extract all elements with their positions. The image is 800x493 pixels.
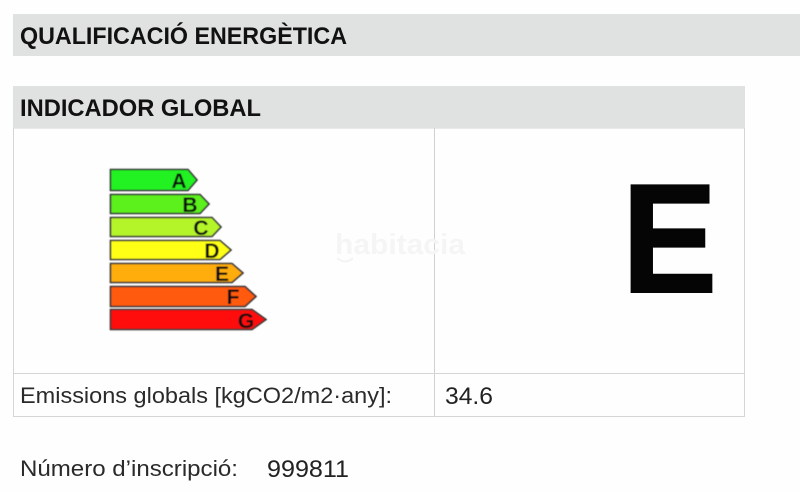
heading: Indicador global: INDICADOR GLOBAL [20,95,261,122]
chart: energy rating arrows A to G: B [182,194,198,217]
chart: energy rating arrows A to G: F [227,286,240,309]
panel: indicador global table [13,86,745,416]
watermark: habitacia: habitacia [335,229,466,261]
chart: energy rating arrows A to G: C [193,217,209,240]
value: emissions: 34.6 [445,383,493,410]
label: registration number: Número d’inscripció: [20,456,238,481]
heading: Indicador global [13,86,745,128]
title bar: Qualificació energètica [13,14,800,56]
chart: energy rating arrows A to G: G [238,310,254,333]
rating letter E: E [622,152,717,325]
label: emissions: Emissions globals [kgCO2/m2·any]: [20,383,392,408]
chart: energy rating arrows A to G: E [215,263,229,286]
chart: energy rating arrows A to G: D [204,240,220,263]
chart: energy rating arrows A to G: A [171,170,187,193]
title bar: Qualificació energètica: QUALIFICACIÓ ENERGÈTICA [20,22,347,50]
value: registration number: 999811 [267,456,349,483]
chart: energy rating arrows A to G [110,170,266,333]
